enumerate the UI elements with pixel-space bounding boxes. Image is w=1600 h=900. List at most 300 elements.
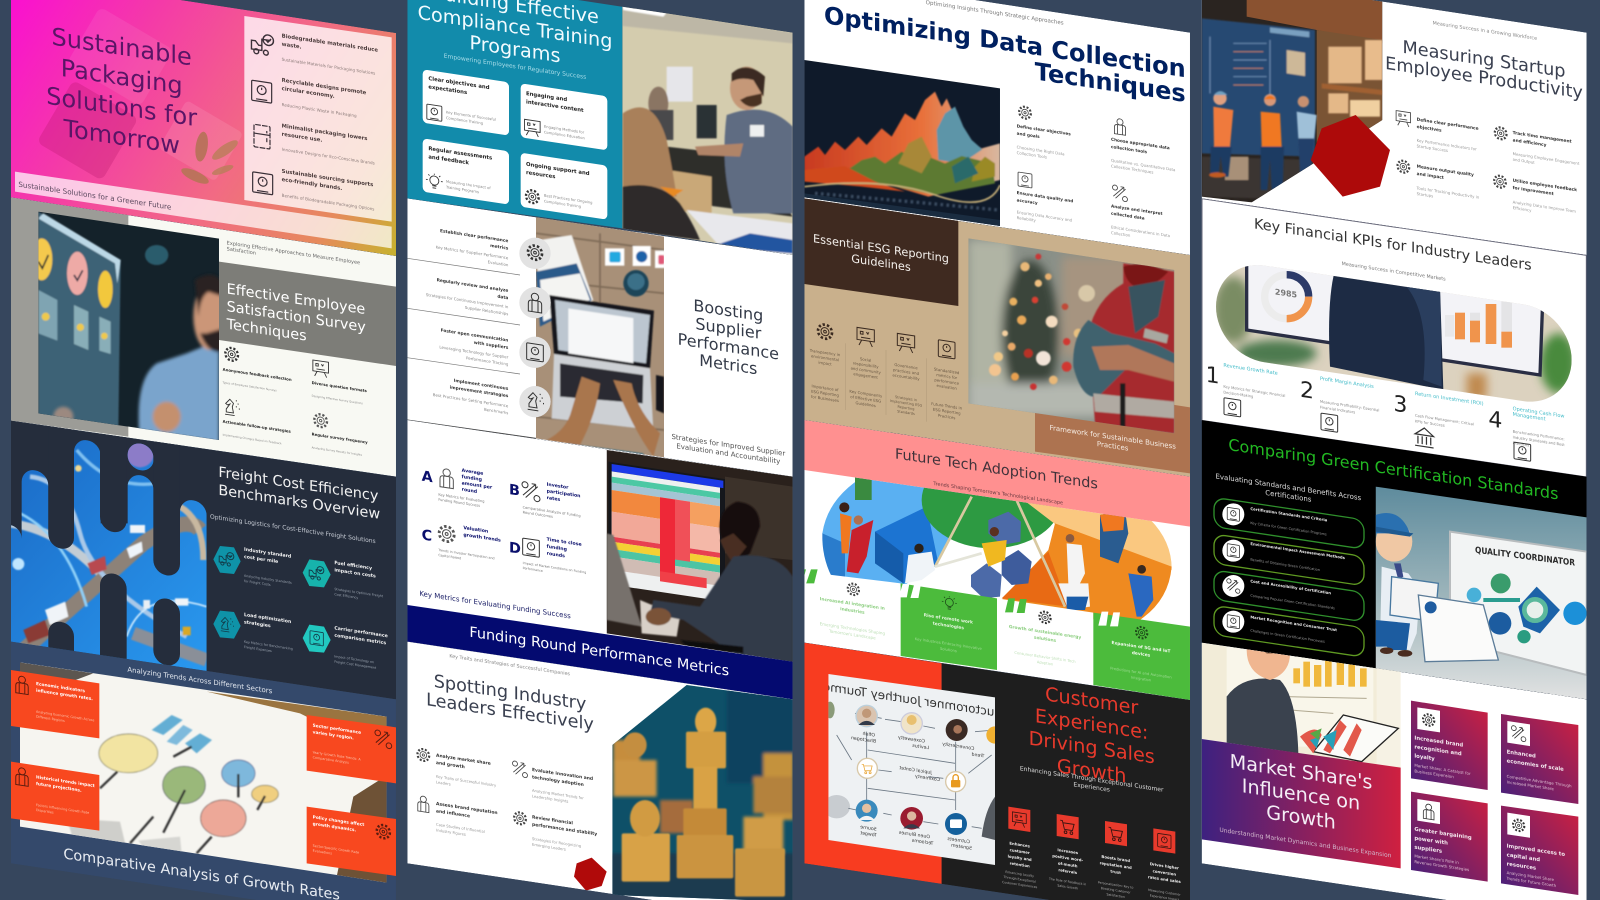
item subtext: Reducing Plastic Waste in Packaging	[282, 102, 357, 118]
item subtext: Cost Efficiency	[334, 592, 358, 600]
item text: cost per mile	[244, 554, 278, 565]
icon	[1321, 413, 1338, 432]
KPI heading: Profit Margin Analysis	[1320, 376, 1374, 390]
column subtext: Key Components	[849, 389, 882, 398]
title: Essential ESG Reporting	[813, 231, 949, 266]
item subtext: Analyzing Industry Standards	[244, 574, 292, 585]
benefit text: conversion	[1153, 868, 1176, 877]
item subtext: Analyzing Market Trends for	[532, 789, 584, 800]
icon	[528, 392, 544, 412]
item text: eco-friendly brands.	[282, 177, 342, 192]
item: define performance	[1396, 111, 1479, 157]
title band	[219, 262, 396, 366]
dark pill slots	[48, 397, 180, 691]
photo: 3D data landscape	[802, 57, 1002, 230]
item text: Recyclable designs promote	[282, 78, 367, 96]
item text: strategies	[244, 619, 271, 629]
card text: resources	[1507, 861, 1536, 872]
number: 1	[1206, 362, 1220, 390]
icon tile	[1417, 799, 1440, 824]
icon	[818, 324, 832, 340]
card subtext: Best Practices for Ongoing	[544, 194, 592, 205]
item subtext: for Freight Costs	[244, 579, 271, 587]
item: regular survey frequency	[312, 413, 368, 457]
card subtext: Compliance Education	[544, 130, 585, 141]
pink title band	[804, 420, 1190, 527]
item subtext: Supplier Relationships	[465, 305, 508, 316]
subtitle: Evaluation and Accountability	[676, 441, 780, 466]
item subtext: and Output	[1513, 157, 1535, 165]
title: Programs	[470, 31, 560, 67]
subtitle: Sustainable Solutions for a Greener Future	[18, 180, 172, 212]
row text: Market Recognition and Consumer Trust	[1250, 614, 1337, 632]
item text: Investor	[547, 482, 569, 491]
card text: industries	[840, 606, 865, 616]
benefit subtext: Customer Experiences	[1002, 880, 1038, 889]
mirrored node labels: Conversersity	[942, 741, 974, 752]
item subtext: Impact of Market Conditions on Funding	[523, 561, 586, 575]
item text: amount per	[462, 480, 493, 491]
slide background gradient	[11, 0, 396, 256]
metric A	[422, 468, 493, 509]
benefit text: Increases	[1057, 847, 1079, 855]
item text: Anonymous feedback collection	[223, 367, 292, 382]
item text: circular economy.	[282, 86, 335, 100]
item: anonymous feedback	[222, 347, 292, 393]
item: sourcing	[253, 169, 374, 212]
slide: freight cost	[0, 397, 396, 699]
bar chart	[1445, 302, 1512, 348]
item text: Regularly review and analyze	[437, 277, 508, 294]
column subtext: ESG Reporting	[933, 407, 961, 416]
row outline	[1214, 497, 1364, 549]
icon	[1397, 160, 1409, 173]
icon: teal hexagon	[213, 546, 241, 574]
item subtext: Round Outcomes	[523, 510, 553, 519]
icon circle	[1222, 503, 1244, 525]
KPI heading: Operating Cash Flow	[1513, 406, 1564, 420]
card subtext: Yearly Growth Rate Trends: A	[313, 750, 361, 762]
column text: and community	[851, 365, 881, 375]
item subtext: Comparative Analysis of Funding	[523, 505, 581, 518]
card subtext: Business Expansion	[1414, 768, 1454, 779]
mirrored node labels: Towget	[860, 830, 878, 839]
icon tile	[1507, 813, 1530, 838]
benefit text: Enhances	[1009, 840, 1031, 849]
card text: influence growth rates.	[36, 688, 93, 702]
mirrored node labels: Jupical Contet	[899, 765, 933, 776]
letter: B	[509, 482, 520, 500]
item text: data	[497, 294, 508, 301]
item: financial performance	[514, 812, 597, 854]
slide background	[1202, 0, 1587, 255]
photo: warehouse team at dashboard	[1197, 0, 1387, 203]
column text: evaluation	[937, 383, 957, 391]
illustrated people	[839, 473, 1153, 617]
item subtext: Evaluation	[488, 259, 509, 267]
item text: Analyze and interpret	[1111, 203, 1163, 216]
item subtext: Freight Cost Management	[334, 660, 377, 670]
teal panel	[407, 0, 622, 228]
icon	[1012, 812, 1026, 828]
item text: Valuation	[463, 525, 488, 535]
card subtext: Compliance Training	[544, 199, 581, 209]
icon	[1060, 820, 1074, 835]
item text: impact on costs	[334, 567, 376, 580]
card subtext: Solutions	[940, 647, 957, 653]
row outline	[1214, 534, 1364, 586]
card shape	[1411, 701, 1488, 790]
item text: for improvement	[1513, 185, 1554, 197]
card text: Historical trends impact	[36, 774, 95, 789]
item: market share	[417, 748, 497, 793]
supplier item: communication	[439, 328, 551, 368]
benefit text: of-mouth	[1058, 861, 1078, 869]
subtitle: Enhancing Sales Through Exceptional Customer	[1020, 765, 1164, 794]
slide: spotting industry leaders	[407, 642, 797, 900]
mirrored node labels: Sourne	[860, 824, 877, 833]
row subtext: Comparing Popular Green Certification Standards	[1250, 594, 1335, 610]
item text: improvement strategies	[450, 385, 509, 399]
icon	[525, 119, 540, 137]
item subtext: Leadership Insights	[532, 794, 568, 804]
icon	[377, 824, 390, 839]
item text: growth trends	[463, 532, 501, 544]
title: Comparing Green Certification Standards	[1228, 435, 1558, 503]
slide background	[1202, 420, 1587, 699]
card shape	[997, 598, 1093, 685]
card subtext: Analyzing Market Share	[1507, 870, 1554, 882]
column subtext: Standards	[897, 409, 915, 416]
item text: funding	[547, 544, 567, 553]
item subtext: Performance	[523, 566, 543, 573]
icon	[938, 340, 955, 359]
card text: Ongoing support and	[526, 162, 590, 177]
orange card: economic indicators	[11, 670, 99, 738]
card subtext: Key Elements of Successful	[446, 110, 496, 122]
card shape	[804, 572, 901, 656]
photo: sketched bubbles on paper	[13, 653, 393, 893]
benefit text: retention	[1010, 861, 1030, 869]
column: social responsibility	[849, 327, 882, 409]
item text: accuracy	[1017, 197, 1038, 205]
card text: suppliers	[1414, 845, 1442, 855]
mirrored node labels: Teclooms	[911, 838, 934, 847]
trend card: AI integration	[794, 569, 901, 656]
item subtext: Collection Techniques	[1111, 163, 1153, 175]
grey side block	[11, 197, 128, 437]
item subtext: Key Traits of Successful Industry	[436, 775, 497, 788]
icon: gear	[225, 347, 238, 362]
card subtext: Measuring the Impact of	[446, 180, 491, 190]
donut chart	[1265, 275, 1309, 319]
item text: funding	[462, 474, 482, 483]
card text: Sector performance	[313, 723, 361, 736]
card text: Policy changes affect	[313, 814, 364, 828]
subtitle: Key Metrics for Evaluating Funding Success	[419, 589, 571, 620]
benefit subtext: The Role of Feedback in	[1048, 877, 1086, 886]
column text: Transparency in	[809, 348, 841, 357]
column subtext: Future Trends in	[931, 401, 963, 411]
item subtext: Industry Figures	[436, 828, 466, 837]
item subtext: Strategies to Optimize Freight	[334, 587, 384, 598]
icon	[1227, 578, 1240, 594]
icon	[1227, 544, 1239, 558]
slide: data collection	[802, 0, 1190, 255]
icon	[523, 538, 539, 557]
item subtext: Capital Raised	[438, 553, 461, 560]
icon square	[1153, 828, 1175, 854]
slide background	[407, 642, 793, 900]
item text: Utilize employee feedback	[1513, 178, 1577, 193]
item text: Evaluate innovation and	[532, 767, 593, 782]
icon tile	[1507, 721, 1530, 746]
row text: Environmental Impact Assessment Methods	[1250, 541, 1346, 560]
card shape	[1093, 613, 1190, 700]
subtitle: Measuring Success in a Growing Workforce	[1433, 20, 1537, 42]
icon	[440, 468, 453, 489]
benefit text: Drives higher	[1150, 861, 1179, 871]
icon	[942, 595, 957, 610]
mirrored node labels: Coximenty	[915, 773, 940, 783]
supplier item: continuous improvement	[433, 377, 551, 417]
slide: employee satisfaction	[11, 197, 396, 477]
icon: truck	[251, 33, 273, 56]
mirrored node labels: Ouen Blurses	[898, 830, 930, 840]
mirrored node labels: Levitus	[912, 743, 929, 751]
mirrored node labels: Cutmeets	[947, 836, 970, 845]
metric: carrier performance	[303, 625, 388, 670]
icon	[897, 333, 915, 353]
benefit subtext: Satisfaction	[1106, 892, 1125, 899]
slide: startup productivity	[1197, 0, 1587, 255]
card text: devices	[1132, 650, 1151, 659]
translucent item panel	[244, 16, 392, 222]
item: define objectives	[1017, 106, 1071, 162]
mirrored node labels: Sgnatem	[951, 842, 972, 852]
subtitle: Key Traits and Strategies of Successful Companies	[449, 653, 571, 677]
item text: Carrier performance	[334, 625, 388, 639]
card subtext: Engaging Methods for	[544, 125, 585, 135]
card text: expectations	[428, 84, 467, 96]
illustration: pie chart with people	[822, 452, 1172, 627]
photo: mirrored customer journey map	[823, 670, 1004, 870]
icon	[1415, 427, 1434, 448]
icon	[526, 189, 539, 204]
item text: Review financial	[532, 814, 573, 827]
icon	[1019, 106, 1031, 119]
card text: Economic indicators	[36, 681, 85, 694]
item text: performance and stability	[532, 822, 597, 837]
slide background	[804, 420, 1190, 700]
card text: Engaging and	[526, 91, 567, 103]
benefit: loyalty	[1002, 807, 1038, 889]
item: employee feedback	[1494, 175, 1577, 220]
photo: laptop on wooden desk	[533, 213, 667, 467]
card text: Greater bargaining	[1414, 827, 1472, 841]
title: Techniques	[1035, 57, 1186, 108]
title: Effective Employee	[227, 281, 365, 318]
title: Solutions for	[46, 82, 197, 132]
trend card: sustainable energy	[997, 598, 1093, 685]
column text: Social	[860, 356, 871, 363]
item subtext: Strategies for Continuous Improvement in	[426, 292, 509, 309]
card text: growth dynamics.	[313, 821, 356, 834]
card subtext: Analyzing Economic Growth Across	[36, 710, 95, 722]
title: Sustainable	[52, 23, 192, 71]
card subtext: Sector-Specific Growth Rate	[313, 844, 359, 855]
title: Tomorrow	[62, 114, 180, 160]
icon tile	[1417, 707, 1440, 732]
icon	[1513, 819, 1524, 832]
cert row 3	[1214, 570, 1364, 622]
item: choose tools	[1111, 118, 1176, 178]
icon	[375, 730, 392, 749]
icon	[1112, 185, 1127, 202]
column subtext: for Businesses	[811, 394, 839, 403]
slide: customer experience	[804, 643, 1190, 900]
icon	[1224, 398, 1241, 417]
item: follow-up strategies	[223, 399, 292, 446]
benefit text: trust	[1110, 869, 1121, 875]
item subtext: Freight Expenses	[244, 645, 272, 653]
column subtext: Guidelines	[856, 400, 876, 408]
donut chart: 2985	[1275, 287, 1298, 300]
icon	[417, 748, 429, 762]
item text: Define clear objectives	[1017, 123, 1071, 137]
title: Growth	[1266, 801, 1336, 834]
slide: market share	[1200, 640, 1587, 900]
icon	[1494, 175, 1506, 188]
benefit subtext: Personalization: Key to	[1098, 880, 1133, 890]
subtitle: Optimizing Insights Through Strategic Approaches	[926, 0, 1064, 27]
trend card: remote work	[899, 583, 997, 670]
item text: Actionable follow-up strategies	[223, 419, 292, 434]
title: Guidelines	[851, 251, 911, 274]
icon: appliances	[253, 172, 273, 195]
benefit card: bargaining power	[1411, 792, 1488, 882]
item text: round	[462, 487, 477, 495]
title: Satisfaction Survey	[227, 299, 366, 336]
card text: power with	[1414, 836, 1448, 847]
background photo: packaging and leaves	[37, 7, 243, 187]
item subtext: Collection Tools	[1017, 150, 1047, 160]
item: recyclable	[252, 78, 367, 118]
mirrored node labels	[851, 729, 985, 852]
hexagon icon glyphs	[219, 551, 324, 646]
icon square	[1105, 821, 1127, 846]
slide: comparative growth rates	[11, 642, 396, 900]
title: Optimizing Data Collection	[824, 1, 1186, 83]
card text: Regular assessments	[428, 146, 492, 162]
card shape	[423, 69, 509, 136]
supplier item: performance metrics	[436, 228, 551, 269]
red heptagon	[574, 858, 607, 891]
icon	[527, 343, 543, 362]
card subtext: Tomorrow's Landscape	[828, 628, 876, 641]
icon	[1227, 615, 1239, 629]
icon circle	[1222, 575, 1244, 597]
item subtext: Key Metrics for Evaluating	[438, 493, 484, 504]
icon: fridge	[254, 124, 270, 149]
item text: Sustainable sourcing supports	[282, 169, 373, 188]
title: Growth	[1057, 754, 1126, 788]
card: clear objectives	[423, 69, 509, 136]
benefit: word of mouth	[1048, 814, 1086, 892]
journey map title: uctoromner Jourthey Tourme	[823, 679, 994, 719]
card shape	[521, 153, 607, 220]
card text: loyalty	[1414, 753, 1435, 762]
title block	[1202, 739, 1401, 868]
card shape	[1501, 806, 1578, 895]
item subtext: Innovative Designs for Eco-Conscious Brands	[282, 147, 375, 166]
item subtext: Analyzing Survey Results for Insights	[312, 445, 363, 457]
item subtext: Sustainable Materials for Packaging Solutions	[282, 57, 375, 76]
card: ongoing support	[521, 153, 607, 220]
card subtext: Market Share's Role in	[1414, 853, 1459, 865]
title: Future Tech Adoption Trends	[895, 446, 1098, 493]
icon	[1114, 118, 1126, 135]
item: time management	[1495, 127, 1580, 172]
column: transparency	[809, 324, 841, 403]
title: Boosting	[693, 296, 763, 325]
item: diverse question formats	[312, 360, 367, 405]
icon: board	[313, 360, 328, 378]
benefit subtext: Enhancing Loyalty	[1005, 870, 1034, 878]
card text: and feedback	[428, 154, 469, 166]
item: analyze data	[1111, 185, 1171, 244]
title: Supplier	[695, 314, 762, 343]
photo: quality coordinator mascot and certificate board	[1373, 483, 1590, 703]
item text: collection tools	[1111, 144, 1148, 154]
column text: Governance	[894, 362, 918, 370]
metric: fuel efficiency	[303, 559, 384, 604]
icon: bottle and apple	[252, 80, 272, 103]
icon	[1018, 172, 1032, 188]
metric: industry standard	[213, 546, 292, 590]
slide background	[11, 197, 396, 477]
item text: Foster open communication	[441, 328, 508, 344]
KPI subtext: Decision-Making	[1223, 390, 1253, 399]
KPI heading: Management	[1513, 412, 1546, 423]
title: Measuring Startup	[1403, 38, 1565, 82]
orange card: policy changes	[307, 807, 396, 876]
title: Leaders Effectively	[426, 690, 594, 735]
icon	[848, 583, 859, 596]
benefit subtext: Measuring Customer	[1148, 888, 1181, 897]
KPI 1	[1206, 362, 1285, 417]
item text: Define clear performance	[1417, 117, 1479, 132]
item subtext: Performance Tracking	[466, 355, 509, 367]
title: Funding Round Performance Metrics	[469, 625, 729, 680]
letter: C	[422, 527, 432, 545]
item subtext: Tools for Tracking Productivity in	[1416, 185, 1480, 200]
icon	[426, 172, 443, 189]
benefit card: economies of scale	[1501, 714, 1578, 804]
slide background	[804, 0, 1190, 255]
quote mark	[899, 584, 921, 598]
subtitle: Satisfaction	[227, 246, 256, 257]
icon	[1495, 127, 1506, 140]
framework box	[1035, 383, 1190, 473]
item text: Fuel efficiency	[334, 560, 372, 572]
item subtext: Qualitative vs. Quantitative Data	[1111, 158, 1176, 172]
column text: accountability	[892, 372, 920, 381]
item subtext: Benchmarks	[484, 407, 508, 415]
item subtext: Funding Round Success	[438, 498, 480, 508]
column subtext: Reporting	[898, 405, 914, 411]
item: minimalist	[254, 123, 375, 166]
